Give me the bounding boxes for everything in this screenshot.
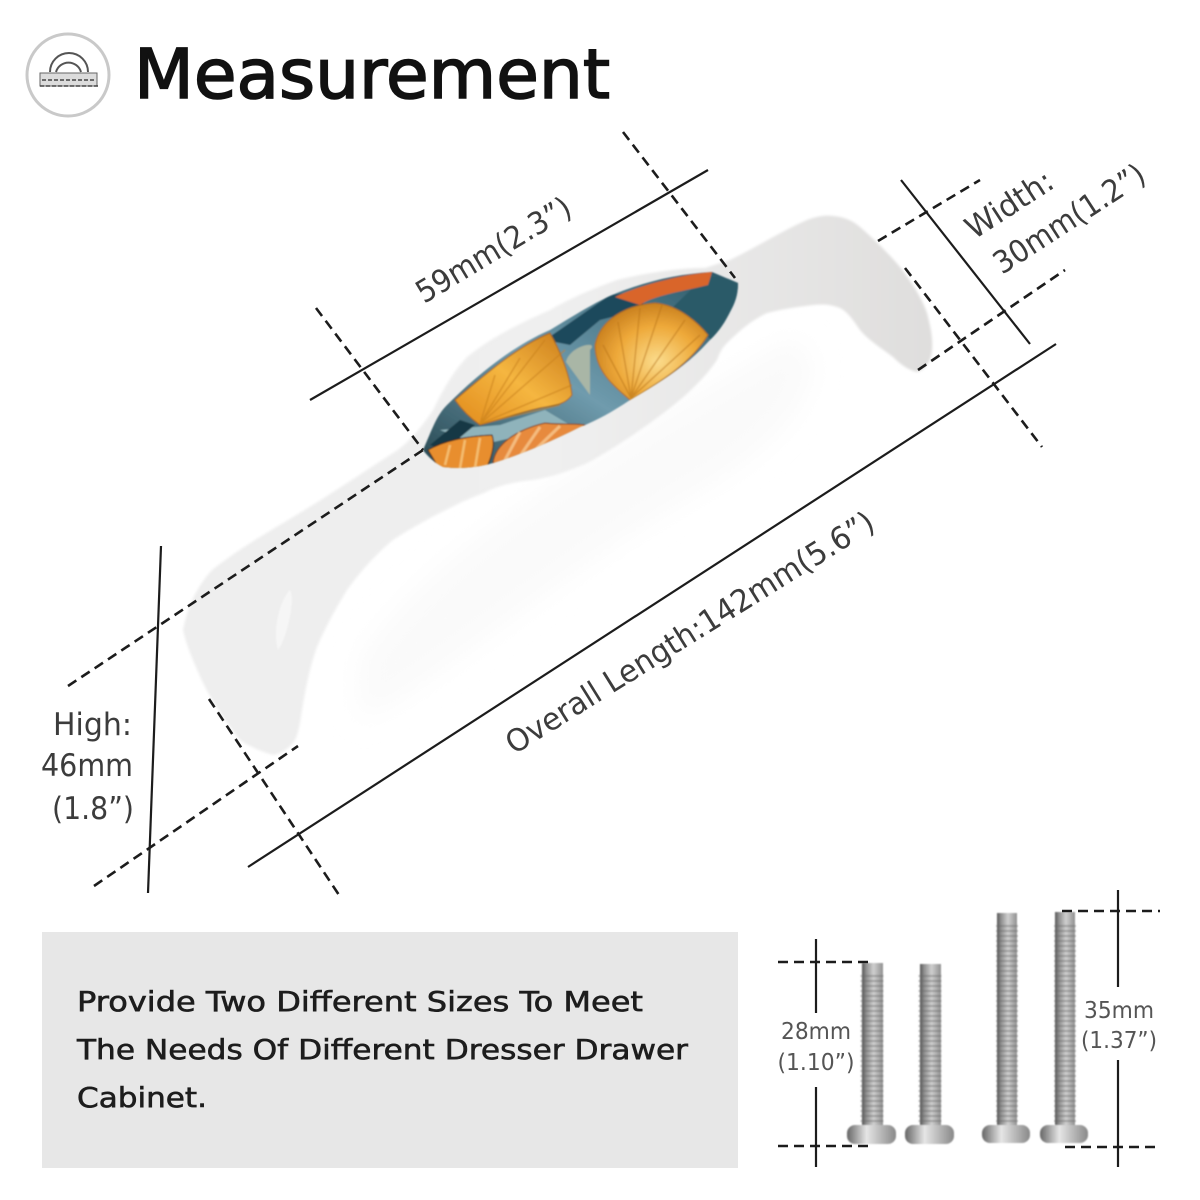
dimension: short screw 28mm: 28mm	[781, 1019, 851, 1045]
dimension: height 46mm: 46mm	[41, 748, 133, 784]
dimension: long screw 35mm: 35mm	[1084, 998, 1154, 1024]
title: Measurement	[134, 35, 610, 115]
dimension: short screw 28mm: (1.10”)	[778, 1050, 854, 1076]
screw 3	[982, 913, 1030, 1143]
screws: two 28mm and two 35mm	[847, 912, 1088, 1144]
cabinet handle illustration	[183, 216, 932, 755]
dimension: width 30mm	[878, 157, 1152, 370]
panel: screw size note	[42, 932, 738, 1168]
dimension: width 30mm: 30mm(1.2”)	[987, 157, 1152, 282]
panel: screw size note: Cabinet.	[77, 1081, 207, 1114]
screw 4	[1040, 912, 1088, 1143]
dimension: height 46mm: (1.8”)	[52, 791, 134, 827]
lower orange shells	[493, 423, 585, 463]
screw 1	[847, 963, 896, 1144]
dimension: overall length 142mm: Overall Length:142mm(5.6”)	[499, 504, 881, 762]
dimension: height 46mm	[41, 450, 423, 893]
dimension: overall length 142mm	[209, 268, 1056, 898]
icon: protractor and ruler badge	[27, 34, 109, 116]
dimension: short screw 28mm	[778, 939, 870, 1167]
panel: screw size note: The Needs Of Different Dresser Drawer	[76, 1033, 689, 1066]
top orange shell	[615, 272, 712, 305]
dimension: insert length 59mm	[310, 132, 735, 450]
handle body	[183, 216, 932, 755]
screw 2	[905, 964, 954, 1144]
panel: screw size note: Provide Two Different Sizes To Meet	[77, 985, 643, 1018]
dimension: height 46mm: High:	[53, 707, 132, 743]
shell pattern insert	[422, 271, 739, 469]
dimension: width 30mm: Width:	[959, 163, 1061, 247]
golden shell left	[455, 333, 572, 425]
dimension: insert length 59mm: 59mm(2.3”)	[410, 190, 578, 311]
golden shell centre	[595, 303, 708, 400]
dimension: long screw 35mm: (1.37”)	[1081, 1028, 1157, 1054]
dimension: long screw 35mm	[1062, 890, 1160, 1167]
